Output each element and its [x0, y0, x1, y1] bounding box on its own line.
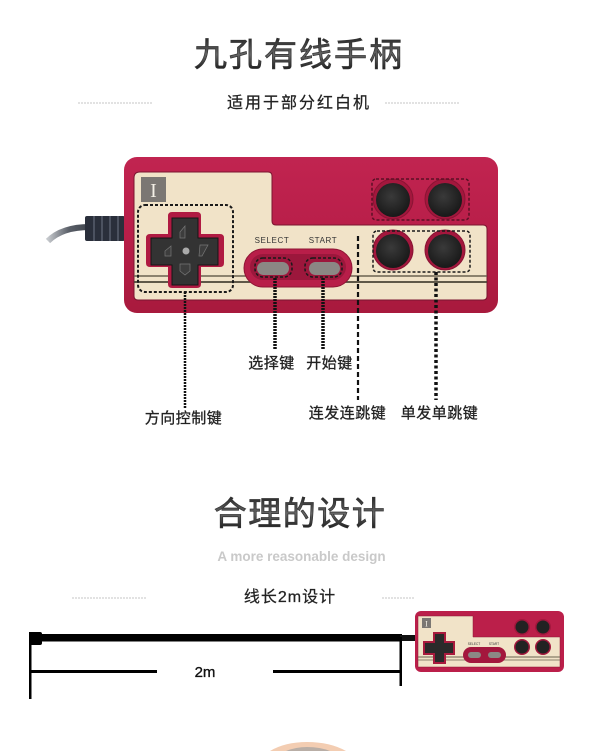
select label: SELECT [255, 236, 289, 245]
controller diagram [124, 157, 498, 313]
label: single jump key: 单发单跳键 [401, 405, 478, 422]
subheading: cable length: 线长2m设计 [244, 588, 336, 606]
label: direction key: 方向控制键 [145, 410, 222, 427]
label: turbo jump key: 连发连跳键 [309, 405, 386, 422]
dimension label: 2m [195, 664, 215, 681]
badge: I [150, 180, 157, 202]
select start well [244, 249, 352, 287]
small controller: START [489, 642, 499, 646]
label: select key: 选择键 [248, 355, 295, 372]
label: start key: 开始键 [306, 355, 353, 372]
small controller [415, 611, 564, 672]
controller body [124, 157, 498, 313]
cream faceplate [134, 172, 487, 300]
badge [141, 177, 166, 202]
small controller: I [425, 620, 428, 628]
subtitle: 适用于部分红白机 [227, 94, 371, 112]
d-pad [146, 212, 224, 288]
cropped object at bottom edge [270, 742, 346, 751]
title: 九孔有线手柄 [194, 36, 404, 73]
decorative lines [134, 275, 487, 277]
dashed highlight boxes [138, 179, 470, 292]
icon: controller cable [48, 216, 125, 241]
leader lines [185, 236, 436, 408]
cable length dimension [29, 632, 415, 699]
english subheading: A more reasonable design [217, 549, 386, 564]
small controller: SELECT [468, 642, 480, 646]
start label: START [309, 236, 337, 245]
heading: reasonable design: 合理的设计 [214, 495, 386, 532]
action buttons [373, 179, 465, 270]
